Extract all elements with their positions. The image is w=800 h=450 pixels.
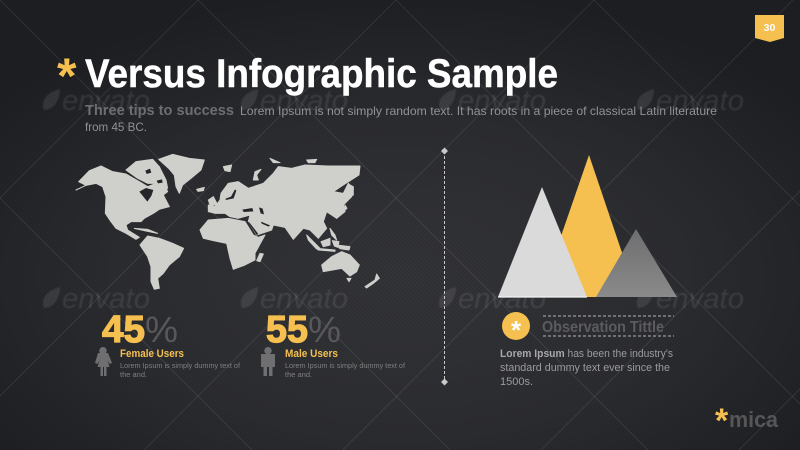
watermarks: envato — [62, 283, 150, 315]
watermarks: envato — [458, 283, 546, 315]
watermarks: envato — [458, 85, 546, 117]
stat: female users: the and. — [120, 370, 147, 379]
observation body: standard dummy text ever since the — [500, 362, 670, 374]
logo: mica — [715, 402, 779, 440]
stat: male users: Lorem Ipsum is simply dummy text of — [285, 361, 406, 370]
title asterisk: * — [57, 48, 77, 104]
stat: male users: the and. — [285, 370, 312, 379]
world map — [76, 154, 379, 289]
subtitle: from 45 BC. — [85, 120, 147, 134]
subtitle: Lorem Ipsum is not simply random text. It has roots in a piece of classical Latin literature — [240, 104, 717, 118]
icon: male — [261, 347, 275, 376]
stat: female users — [95, 309, 241, 379]
watermarks — [43, 85, 744, 315]
page number badge: 30 — [764, 22, 775, 34]
watermarks: envato — [260, 283, 348, 315]
stat: male users: 55 — [266, 309, 308, 351]
stat: female users: Lorem Ipsum is simply dummy text of — [120, 361, 241, 370]
icon: observation asterisk — [502, 312, 530, 345]
observation body: Lorem Ipsum has been the industry's — [500, 348, 673, 360]
observation body — [500, 348, 673, 388]
triangle chart — [498, 155, 677, 297]
icon: female — [95, 347, 112, 376]
watermarks: envato — [656, 283, 744, 315]
icon: observation asterisk: * — [511, 315, 522, 345]
watermarks: envato — [260, 85, 348, 117]
title: Versus Infographic Sample — [85, 52, 558, 96]
stat: female users: % — [145, 309, 178, 350]
stat: male users — [261, 309, 406, 379]
stat: male users: Male Users — [285, 348, 338, 360]
logo: mica: * — [715, 402, 729, 440]
divider — [441, 148, 448, 386]
subtitle: Three tips to success — [85, 102, 234, 119]
subtitle — [85, 102, 717, 134]
observation title: Observation Tittle — [542, 319, 664, 336]
stat: female users: 45 — [102, 309, 145, 351]
watermarks: envato — [62, 85, 150, 117]
watermarks: envato — [656, 85, 744, 117]
page number badge — [755, 15, 784, 42]
logo: mica: mica — [729, 407, 779, 432]
stat: female users: Female Users — [120, 348, 184, 360]
observation body: 1500s. — [500, 376, 533, 388]
stat: male users: % — [308, 309, 341, 350]
